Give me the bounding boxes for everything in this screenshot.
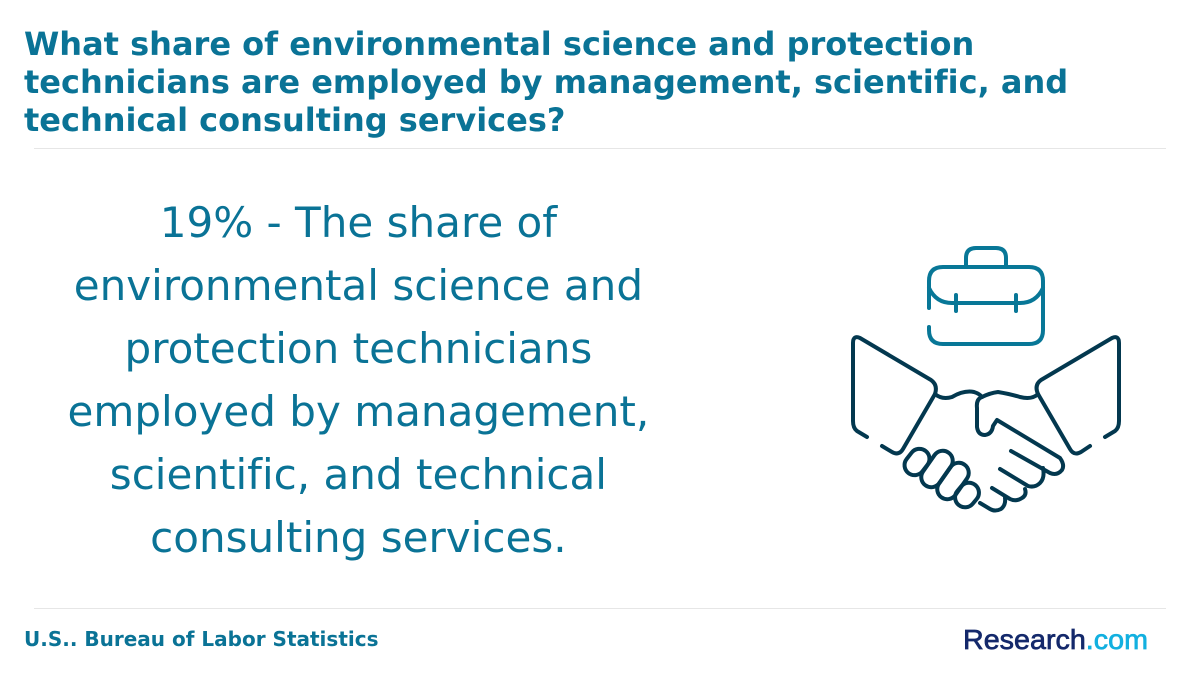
main statement text: 19% - The share of bbox=[160, 198, 557, 247]
main statement text: consulting services. bbox=[150, 513, 567, 562]
main statement text: protection technicians bbox=[125, 324, 592, 373]
icon: handshake bbox=[853, 337, 1119, 511]
icon: briefcase bbox=[929, 248, 1043, 344]
title bbox=[24, 25, 1068, 139]
main statement text bbox=[68, 198, 649, 562]
main statement text: environmental science and bbox=[74, 261, 643, 310]
main statement text: scientific, and technical bbox=[110, 450, 607, 499]
title: technicians are employed by management, scientific, and bbox=[24, 63, 1068, 101]
main statement text: employed by management, bbox=[68, 387, 649, 436]
title: technical consulting services? bbox=[24, 101, 565, 139]
title: What share of environmental science and protection bbox=[24, 25, 974, 63]
logo: Research.com bbox=[963, 624, 1148, 655]
source: U.S.. Bureau of Labor Statistics bbox=[24, 626, 378, 650]
